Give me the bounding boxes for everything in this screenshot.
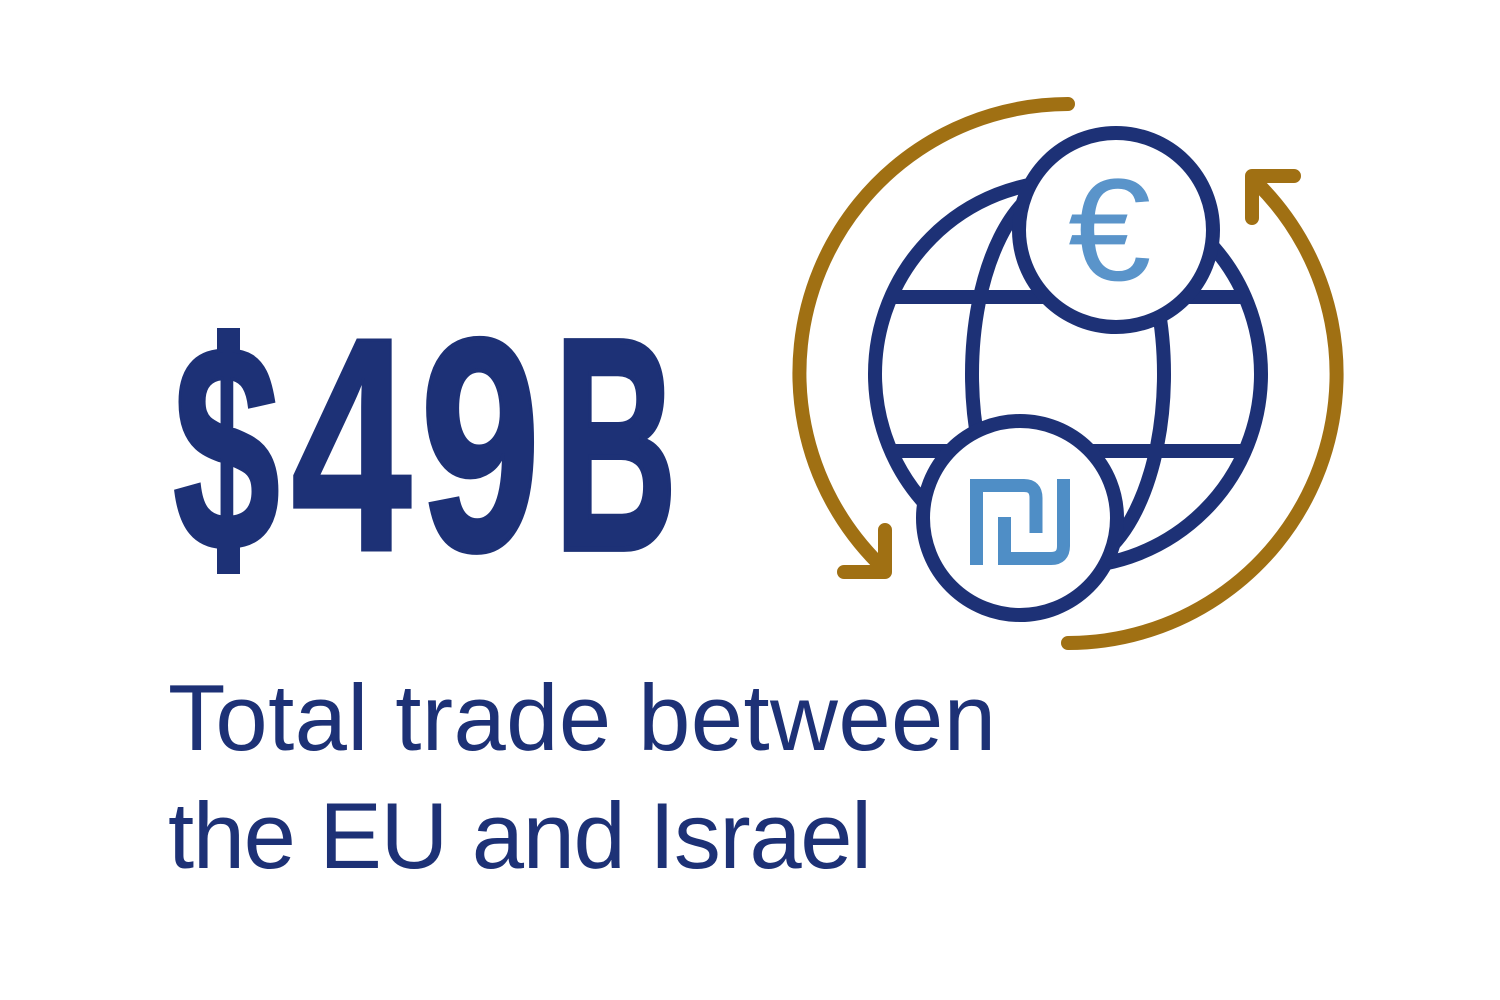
headline figure: $49B: 4: [291, 274, 413, 616]
arrow: counterclockwise gold arc, left side: [799, 104, 1068, 572]
icon: globe: [875, 181, 1261, 567]
icon: euro coin: €: [1068, 149, 1151, 312]
description text: [168, 665, 996, 888]
arrow: counterclockwise gold arc, right side: [1068, 176, 1337, 643]
icon: euro coin: [1019, 133, 1213, 327]
headline figure: $49B: B: [554, 276, 677, 613]
description text: Total trade between: [168, 665, 996, 770]
headline figure: $49B: [173, 274, 677, 616]
headline figure: $49B: $: [173, 284, 280, 613]
description text: the EU and Israel: [168, 783, 872, 888]
headline figure: $49B: 9: [420, 275, 541, 614]
icon: shekel coin: [923, 421, 1117, 615]
icon: globe with currency coins and exchange arrows: [799, 104, 1337, 643]
